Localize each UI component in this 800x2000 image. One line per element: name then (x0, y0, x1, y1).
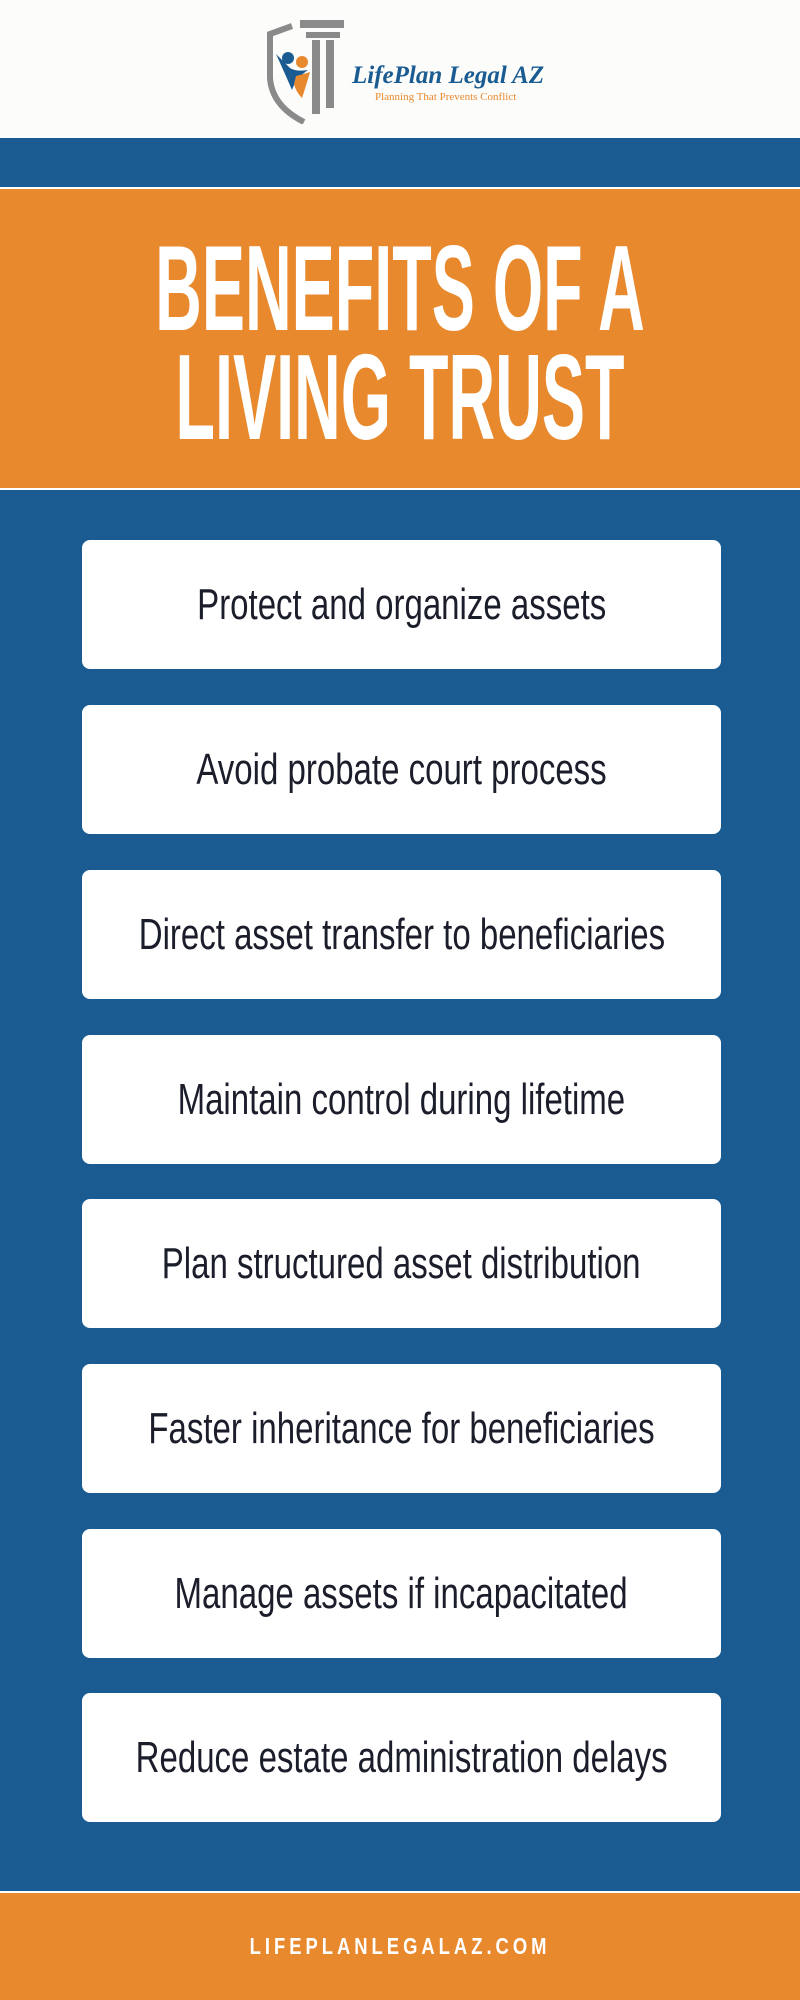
header: logo area (0, 0, 800, 138)
tagline: Planning That Prevents Conflict (375, 91, 516, 103)
logo text: LifePlan Legal AZ (352, 62, 544, 89)
benefit 5: Plan structured asset distribution (162, 1238, 641, 1288)
benefit 8: Reduce estate administration delays (136, 1732, 667, 1782)
benefit 8 (82, 1693, 721, 1822)
benefit 2: Avoid probate court process (196, 744, 607, 794)
benefit 4: Maintain control during lifetime (178, 1074, 625, 1124)
benefit 7: Manage assets if incapacitated (175, 1568, 628, 1618)
benefit 6 (82, 1364, 721, 1493)
benefit 3: Direct asset transfer to beneficiaries (138, 910, 665, 958)
footer url: LIFEPLANLEGALAZ.COM (250, 1933, 550, 1959)
benefit 2 (82, 705, 721, 834)
benefit 6: Faster inheritance for beneficiaries (148, 1404, 655, 1452)
icon: shield logo (267, 20, 344, 124)
footer (0, 1891, 800, 2000)
benefit 5 (82, 1199, 721, 1328)
benefit 4 (82, 1035, 721, 1164)
benefit 1 (82, 540, 721, 669)
benefit 1: Protect and organize assets (197, 580, 606, 628)
benefit 3 (82, 870, 721, 999)
benefit 7 (82, 1529, 721, 1658)
title band (0, 187, 800, 490)
title: BENEFITS OF A (155, 220, 645, 356)
title: LIVING TRUST (175, 329, 625, 465)
title (155, 220, 645, 465)
